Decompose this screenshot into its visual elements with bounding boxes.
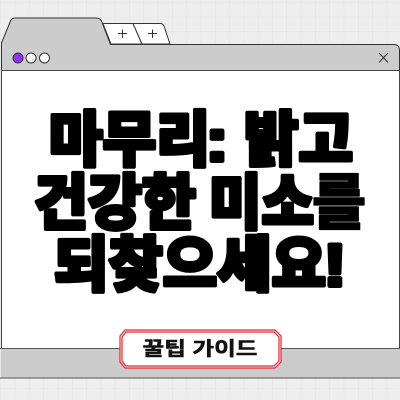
badge frame (120, 330, 281, 368)
inactive tab 1 (103, 24, 142, 44)
icon: plus (118, 30, 127, 38)
content area (2, 70, 400, 348)
window control: white dot 2 (40, 53, 50, 63)
window title bar (2, 18, 400, 70)
icon: close (379, 53, 388, 62)
inactive tab 2 (133, 24, 170, 44)
title: 밝고 (244, 107, 353, 174)
bottom bar (1, 348, 400, 378)
title: 미소 (209, 170, 314, 237)
title: 를 (312, 170, 366, 237)
title (34, 107, 366, 299)
title: 건강한 (34, 170, 196, 237)
icon: plus 2 (148, 30, 157, 38)
title: : (205, 107, 229, 174)
title: ! (323, 232, 347, 299)
badge inner frame (122, 332, 279, 366)
window control: purple dot (13, 53, 23, 63)
title: 되찾으세요 (54, 232, 326, 299)
badge (120, 330, 281, 368)
title: 마무리 (49, 107, 210, 174)
window control: white dot (26, 53, 36, 63)
bottom bar edges (0, 348, 400, 378)
badge label: 꿀팁 가이드 (142, 338, 258, 360)
